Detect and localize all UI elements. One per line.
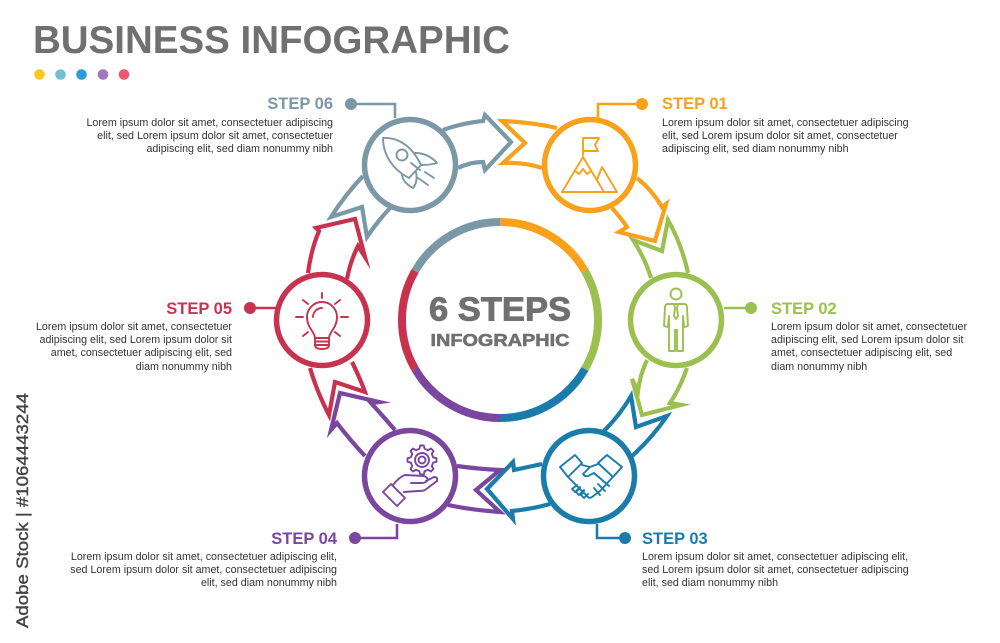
step 05 group — [36, 219, 368, 415]
step 03 group — [487, 396, 909, 589]
arrow: step 01 to step 02 — [612, 178, 666, 241]
step 06 group — [86, 95, 511, 237]
step 05 text: Lorem ipsum dolor sit amet, consectetuer — [36, 321, 232, 333]
step 04 text: sed Lorem ipsum dolor sit amet, consectetuer adipiscing — [70, 564, 337, 576]
step 01 text: Lorem ipsum dolor sit amet, consectetuer adipiscing — [662, 117, 909, 129]
arrow: step 05 tail — [310, 362, 365, 415]
circle: step 06 — [364, 120, 456, 210]
icon: light bulb — [296, 293, 348, 349]
step 05 text: amet, consectetuer adipiscing elit, sed — [51, 347, 232, 359]
centre heading: 6 STEPS — [429, 292, 571, 329]
circle: step 03 — [544, 430, 634, 522]
circle: step 05 — [276, 274, 368, 366]
step 05 text: diam nonummy nibh — [136, 361, 232, 373]
decorative colour dots — [34, 69, 129, 80]
step 01 heading: STEP 01 — [662, 95, 728, 113]
step 02 text: adipiscing elit, sed Lorem ipsum dolor sit — [771, 334, 963, 346]
leader line: step 01 — [598, 98, 648, 118]
step 02 text: amet, consectetuer adipiscing elit, sed — [771, 347, 952, 359]
step 05 text: adipiscing elit, sed Lorem ipsum dolor sit — [40, 334, 232, 346]
arrow: step 05 to step 06 — [308, 219, 365, 279]
arrow: step 06 to step 01 — [443, 115, 511, 170]
step 03 text: sed Lorem ipsum dolor sit amet, consectetuer adipiscing — [642, 564, 909, 576]
arrow: step 02 tail — [633, 220, 688, 278]
icon: rocket — [383, 138, 437, 188]
step 02 text — [771, 321, 967, 373]
step 04 text: Lorem ipsum dolor sit amet, consectetuer adipiscing elit, — [71, 551, 337, 563]
step 06 heading: STEP 06 — [267, 95, 333, 113]
step 01 text: elit, sed Lorem ipsum dolor sit amet, consectetuer — [662, 130, 898, 142]
icon: mountain with flag — [562, 138, 617, 192]
leader line: step 03 — [597, 524, 631, 544]
step 02 group — [630, 220, 967, 415]
centre subheading: INFOGRAPHIC — [430, 330, 570, 350]
circle: step 01 — [544, 120, 636, 210]
step 04 text: elit, sed diam nonummy nibh — [201, 577, 337, 589]
step 01 text — [662, 117, 909, 155]
leader line: step 04 — [349, 524, 397, 544]
step 03 heading: STEP 03 — [642, 530, 708, 548]
step 03 text — [642, 551, 909, 589]
arrow: step 04 tail — [448, 466, 500, 512]
step 06 text — [86, 117, 333, 155]
arrow: step 06 tail — [331, 176, 390, 237]
step 06 text: Lorem ipsum dolor sit amet, consectetuer adipiscing — [86, 117, 333, 129]
step 05 heading: STEP 05 — [166, 300, 232, 318]
arrow: step 01 tail — [502, 121, 557, 168]
arrow: step 04 to step 05 — [331, 393, 395, 456]
step 04 text — [70, 551, 337, 589]
step 03 text: elit, sed diam nonummy nibh — [642, 577, 778, 589]
circle: step 04 — [364, 430, 456, 522]
step 06 text: adipiscing elit, sed diam nonummy nibh — [146, 143, 333, 155]
step 06 text: elit, sed Lorem ipsum dolor sit amet, consectetuer — [97, 130, 333, 142]
icon: business person — [664, 288, 688, 351]
step 02 text: Lorem ipsum dolor sit amet, consectetuer — [771, 321, 967, 333]
arrow: step 03 tail — [604, 396, 667, 456]
step 05 text — [36, 321, 232, 373]
leader line: step 02 — [724, 302, 757, 314]
step 01 text: adipiscing elit, sed diam nonummy nibh — [662, 143, 849, 155]
icon: hand holding gear — [383, 445, 437, 506]
leader line: step 05 — [244, 302, 276, 314]
circle: step 02 — [630, 274, 722, 366]
leader line: step 06 — [345, 98, 395, 118]
step 04 heading: STEP 04 — [271, 530, 338, 548]
centre segmented ring — [402, 222, 598, 418]
step 02 text: diam nonummy nibh — [771, 361, 867, 373]
arrow: step 02 to step 03 — [632, 360, 687, 415]
step 03 text: Lorem ipsum dolor sit amet, consectetuer adipiscing elit, — [642, 551, 908, 563]
icon: handshake — [560, 455, 622, 498]
side credit text: Adobe Stock | #1064443244 — [13, 393, 32, 628]
arrow: step 03 to step 04 — [487, 462, 550, 519]
step 02 heading: STEP 02 — [771, 300, 837, 318]
title: BUSINESS INFOGRAPHIC — [33, 19, 510, 62]
step 04 group — [70, 393, 500, 589]
step 01 group — [502, 95, 909, 241]
